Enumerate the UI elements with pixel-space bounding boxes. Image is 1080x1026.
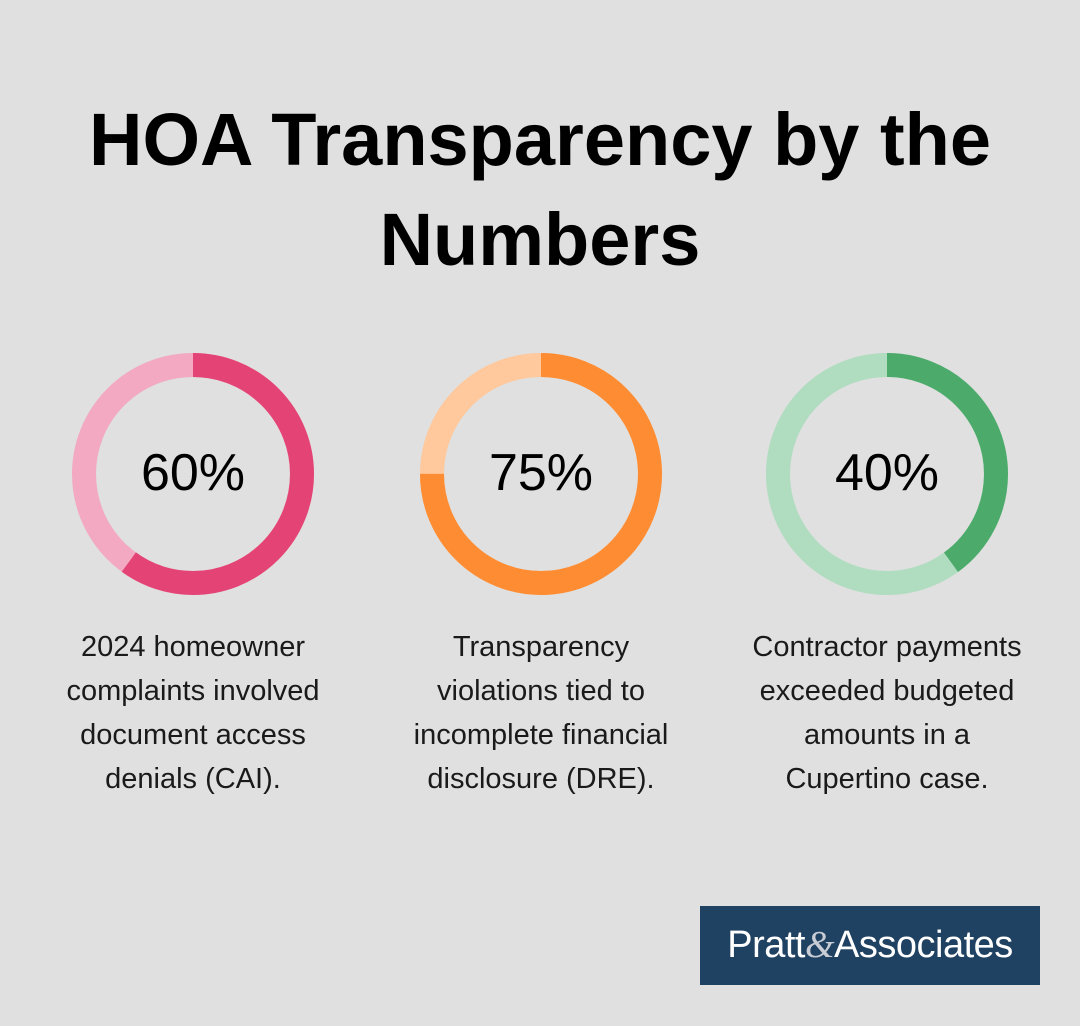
number: 40% <box>835 444 939 502</box>
description: incomplete financial <box>414 719 668 751</box>
description: denials (CAI). <box>105 763 281 795</box>
logo <box>700 906 1040 985</box>
description: disclosure (DRE). <box>427 763 655 795</box>
donut: 60% <box>72 353 314 595</box>
title: HOA Transparency by the <box>89 98 991 181</box>
number: 60% <box>141 444 245 502</box>
description: 2024 homeowner <box>81 631 305 663</box>
description <box>66 631 320 795</box>
description <box>752 631 1022 795</box>
description: violations tied to <box>437 675 645 707</box>
description: document access <box>80 719 306 751</box>
description: Contractor payments <box>752 631 1022 663</box>
description: complaints involved <box>66 675 320 707</box>
donut: 75% <box>420 353 662 595</box>
logo: Pratt&Associates <box>727 924 1013 966</box>
stat: 75% <box>414 353 668 795</box>
stat: 40% <box>752 353 1022 795</box>
title <box>89 98 991 281</box>
description: Transparency <box>453 631 629 663</box>
description: exceeded budgeted <box>760 675 1014 707</box>
description: Cupertino case. <box>785 763 989 795</box>
description <box>414 631 668 795</box>
number: 75% <box>489 444 593 502</box>
title: Numbers <box>380 198 700 281</box>
description: amounts in a <box>804 719 970 751</box>
donut: 40% <box>766 353 1008 595</box>
stat: 60% <box>66 353 320 795</box>
